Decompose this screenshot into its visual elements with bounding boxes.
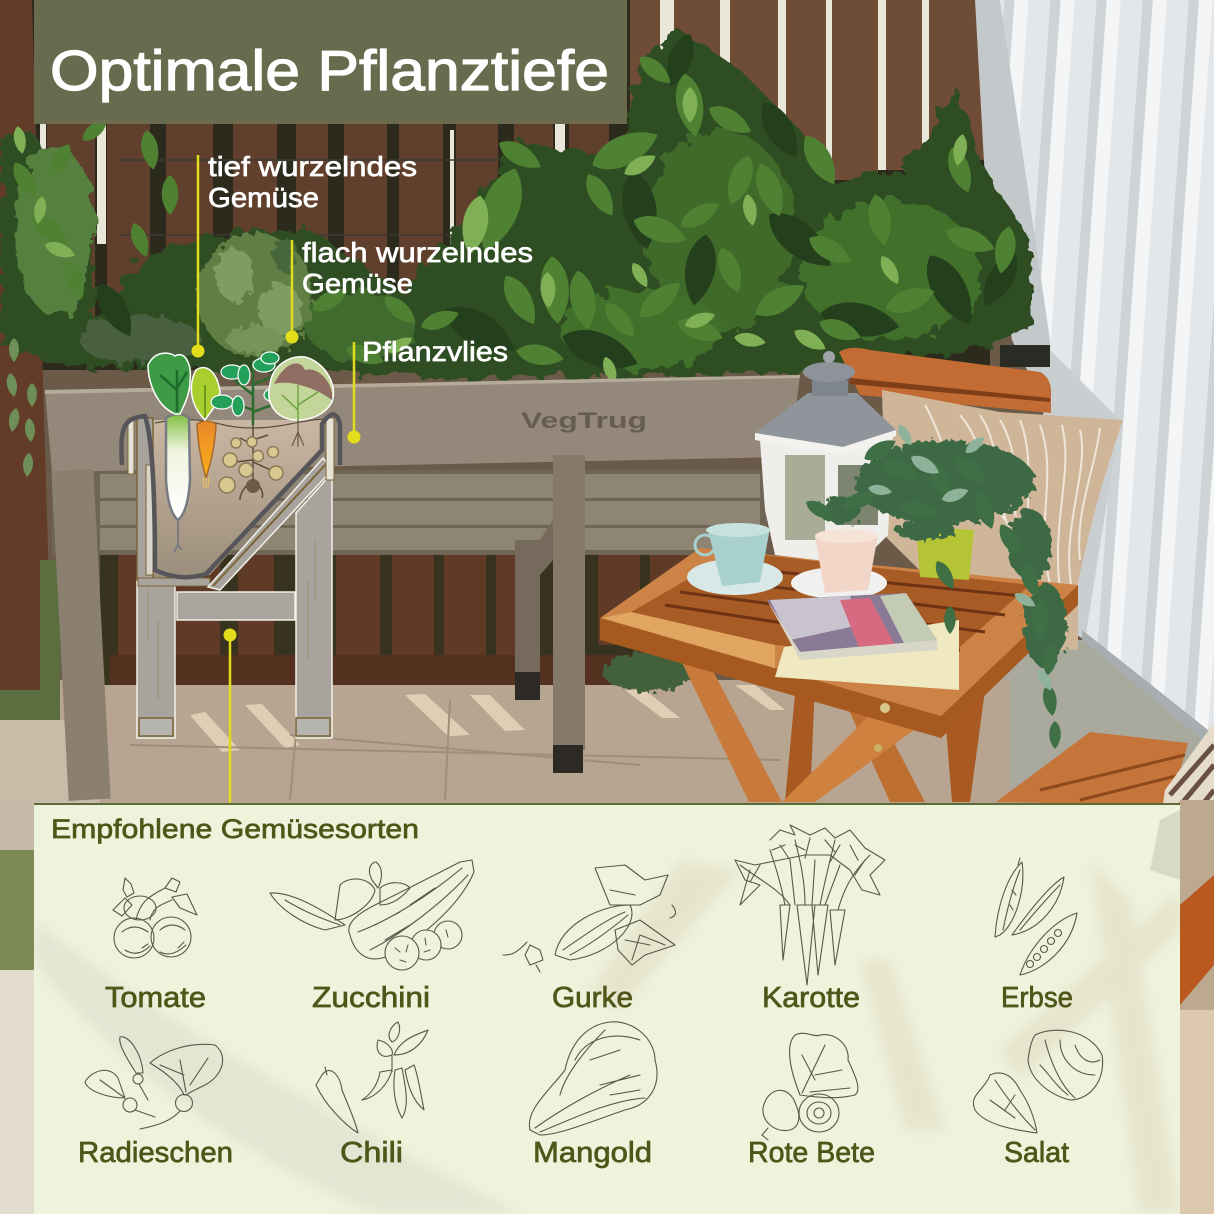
vegetable: chard [529,1022,657,1169]
vegetable: lettuce and cabbage: Salat [1004,1137,1069,1169]
callout: deep-rooted vegetables [192,151,417,358]
cross-section illustration of planter [121,352,340,738]
vegetable: carrots [735,825,885,1014]
potted ivy [803,422,1067,749]
panel heading: Empfohlene Gemüsesorten [51,814,419,844]
hanging herbs on left [5,338,37,477]
patio floor [0,560,1010,810]
vegetable: zucchini [270,860,474,1014]
callout: deep-rooted vegetables: tief wurzelndes [208,151,417,182]
vegetable: lettuce and cabbage [973,1030,1103,1169]
callout: connector to recommended varieties [224,628,236,804]
callout: planting fleece [348,336,508,444]
diagonal slats [208,458,332,590]
vegetable: radishes [78,1037,233,1169]
vegetable: chili [316,1022,428,1169]
right leg [296,473,332,738]
callout: shallow-rooted vegetables [286,237,533,344]
radish [148,353,190,552]
brand mark on planter: VegTrug [521,408,647,433]
soil [153,420,323,578]
chair back [839,345,1051,413]
left wall [128,418,210,586]
callouts [192,151,533,804]
vegetable: peas [995,858,1077,1014]
vegetable: cucumber: Gurke [552,982,633,1014]
foliage mass [0,30,1030,477]
callout: deep-rooted vegetables: Gemüse [208,182,319,213]
cross bar [177,592,295,620]
dark leaves [89,30,1026,379]
floor and grass left of panel [0,800,34,1214]
lantern [755,351,896,565]
carrot [191,368,220,488]
vegetable: chard: Mangold [533,1137,652,1169]
title banner [34,0,627,124]
vegetable: radishes: Radieschen [78,1137,233,1169]
callout: shallow-rooted vegetables: flach wurzelndes [302,237,533,268]
wooden fence background [0,0,990,700]
left leg [137,580,175,738]
vegetable: peas: Erbse [1001,982,1073,1014]
vegetable: tomato: Tomate [105,982,206,1014]
panel: recommended vegetables [34,803,1180,1214]
callout: shallow-rooted vegetables: Gemüse [302,268,413,299]
cups and saucers [687,523,887,599]
right wall [326,418,334,480]
pillow [882,390,1123,650]
vegetable: carrots: Karotte [762,982,860,1014]
title: Optimale Pflanztiefe [50,39,609,103]
mid green leaves [8,51,1019,370]
vegetable: beetroot [748,1033,875,1169]
vegetable: chili: Chili [340,1137,403,1169]
feathery herb [197,233,313,357]
books [767,593,959,690]
light leaves [12,87,969,385]
trough planter [45,375,800,801]
fleece liner [121,414,340,577]
lettuce [269,357,333,447]
corrugated wall [975,0,1214,810]
folding table [600,548,1078,802]
soil surface line [155,419,323,428]
lower fence behind planter [100,535,693,692]
front chair and cushion [996,723,1214,1214]
vegetable: zucchini: Zucchini [312,982,430,1014]
vegetable: tomato [105,878,206,1014]
potato plant [211,352,290,500]
callout: planting fleece: Pflanzvlies [362,336,508,367]
vegetable: beetroot: Rote Bete [748,1137,875,1169]
vegetable: cucumber [503,865,676,1014]
